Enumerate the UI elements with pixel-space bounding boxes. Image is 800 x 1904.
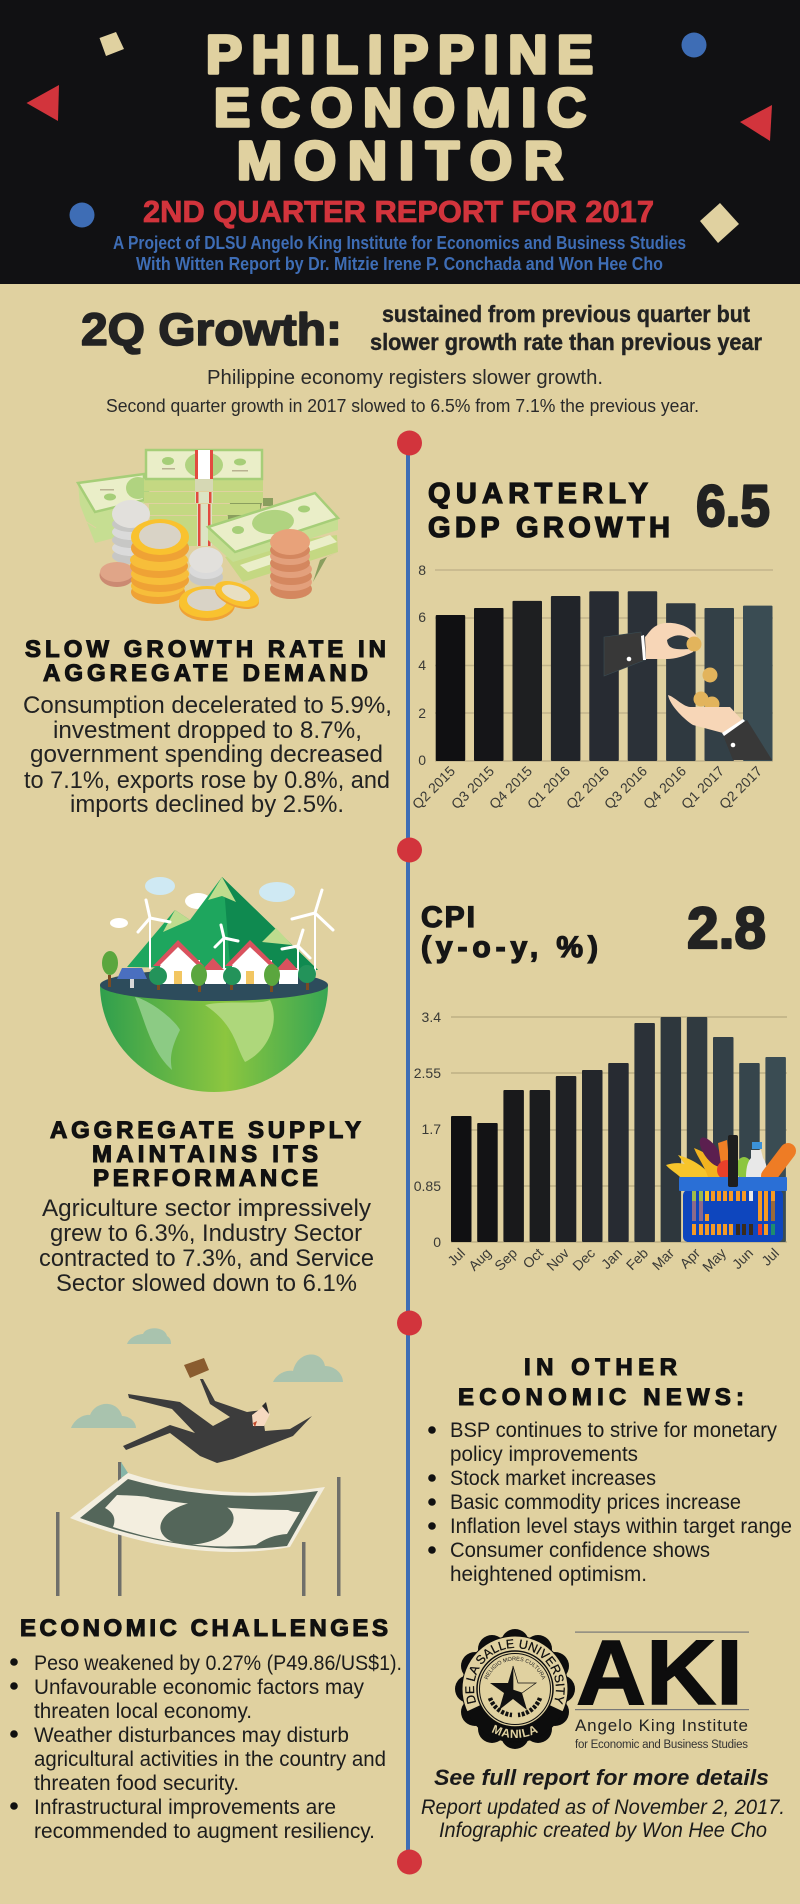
value 6.5: 6.5 (696, 474, 770, 539)
bar chart: CPI: Mar (649, 1245, 677, 1273)
body text: Consumption decelerated to 5.9%, (23, 692, 392, 719)
body text: Agriculture sector impressively (42, 1195, 371, 1222)
icon: money pile (78, 450, 338, 621)
timeline (397, 430, 422, 1874)
banknote net (70, 1473, 325, 1552)
bullet list: BSP continues to strive for monetary (450, 1418, 777, 1442)
bar chart: CPI: Jun (729, 1245, 756, 1272)
logo: Angelo King Institute: for Economic and Business Studies (575, 1739, 748, 1751)
bar chart: GDP: Q2 2015 (409, 763, 458, 812)
panel: aggregate demand text (23, 636, 392, 818)
bar chart: GDP: 2 (418, 705, 426, 721)
bar chart: GDP: 0 (418, 752, 426, 768)
bullet list: policy improvements (450, 1442, 638, 1466)
body text: investment dropped to 8.7%, (53, 717, 362, 744)
bar chart: GDP: 6 (418, 609, 426, 625)
bar chart: CPI: Dec (569, 1245, 598, 1274)
heading: GDP GROWTH (428, 512, 670, 544)
heading (458, 1354, 744, 1411)
heading: IN OTHER (524, 1354, 677, 1381)
bar chart: CPI: Feb (623, 1245, 651, 1273)
silver coin stack middle (189, 547, 223, 586)
subheading: slower growth rate than previous year (370, 329, 762, 355)
title: PHILIPPINE (206, 25, 593, 85)
heading: ECONOMIC NEWS: (458, 1384, 744, 1411)
heading: slow growth rate: SLOW GROWTH RATE IN (25, 636, 386, 663)
project credits: With Witten Report by Dr. Mitzie Irene P. Conchada and Won Hee Cho (136, 254, 663, 274)
copper coin (100, 563, 134, 587)
bar chart: CPI (414, 1009, 787, 1275)
body text: government spending decreased (30, 741, 383, 768)
project credits: A Project of DLSU Angelo King Institute for Economics and Business Studies (113, 233, 686, 253)
logo: De La Salle University seal: RELIGIO MORES CULTURA (484, 1656, 546, 1680)
subheading: sustained from previous quarter but (382, 301, 750, 327)
icon: green earth with village (100, 877, 333, 1092)
bullet list: Infrastructural improvements are (34, 1795, 336, 1819)
bar chart: CPI: Jan (598, 1245, 625, 1272)
icon: hands and coins (604, 623, 772, 760)
panel: CPI (414, 896, 788, 1275)
bullet list: threaten food security. (34, 1771, 239, 1795)
heading (428, 478, 670, 544)
bar chart: GDP: 4 (418, 657, 426, 673)
bullet list: Stock market increases (450, 1466, 656, 1490)
heading: QUARTERLY (428, 478, 648, 510)
heading: CPI (421, 901, 475, 934)
footer notes (421, 1765, 785, 1842)
paper band (195, 450, 213, 479)
bar chart: CPI: Sep (491, 1245, 520, 1274)
bar chart: GDP: Q2 2017 (716, 763, 765, 812)
icon: red triangle left (26, 85, 59, 121)
bullet list: agricultural activities in the country and (34, 1747, 386, 1771)
body text: contracted to 7.3%, and Service (39, 1245, 374, 1272)
intro text (106, 366, 699, 416)
bar chart: CPI: 0.85 (414, 1178, 441, 1194)
bar chart: GDP: Q2 2016 (563, 763, 612, 812)
bar chart: GDP: Q4 2016 (640, 763, 689, 812)
body text: to 7.1%, exports rose by 0.8%, and (24, 767, 390, 794)
footer notes: Report updated as of November 2, 2017. (421, 1796, 785, 1819)
trees (102, 951, 316, 992)
bullet list: threaten local economy. (34, 1699, 252, 1723)
bar chart: GDP: 8 (418, 562, 426, 578)
bullet list (10, 1651, 402, 1843)
heading: (y-o-y, %) (421, 931, 598, 964)
intro text: Philippine economy registers slower growth. (207, 366, 603, 389)
bar chart: CPI: Apr (676, 1245, 703, 1272)
hemisphere globe (100, 985, 328, 1092)
body text: imports declined by 2.5%. (70, 791, 344, 818)
body text (39, 1195, 374, 1297)
bullet list (428, 1418, 792, 1586)
heading: slow growth rate (25, 636, 386, 687)
heading: aggregate supply (50, 1117, 361, 1192)
bullet list: recommended to augment resiliency. (34, 1819, 375, 1843)
icon: blue circle left (70, 202, 94, 228)
intro text: Second quarter growth in 2017 slowed to 6.5% from 7.1% the previous year. (106, 396, 699, 416)
bar chart: GDP (409, 562, 773, 812)
heading: slow growth rate: AGGREGATE DEMAND (43, 660, 368, 687)
footer notes: See full report for more details (434, 1765, 769, 1790)
logo: De La Salle University seal (455, 1629, 575, 1749)
gold coins front (179, 589, 235, 621)
clouds (71, 1328, 343, 1428)
bar chart: CPI: Jul (444, 1245, 468, 1269)
project credits (113, 233, 686, 274)
shadow (263, 498, 273, 506)
right bills (313, 552, 338, 582)
bar chart: CPI: Nov (543, 1245, 572, 1274)
subtitle: quarter report: 2ND QUARTER REPORT FOR 2017 (143, 194, 654, 229)
briefcase (184, 1358, 209, 1378)
panel: economic challenges (10, 1615, 402, 1843)
body text: grew to 6.3%, Industry Sector (50, 1220, 362, 1247)
header band (0, 0, 800, 284)
panel: other economic news (428, 1354, 792, 1586)
bullet list: Unfavourable economic factors may (34, 1675, 364, 1699)
title: ECONOMIC (214, 78, 586, 138)
houses (153, 940, 298, 984)
heading: ECONOMIC CHALLENGES (20, 1615, 388, 1642)
bar chart: GDP: Q4 2015 (486, 763, 535, 812)
bar chart: CPI: Oct (519, 1245, 546, 1272)
icon: red triangle right (740, 105, 772, 141)
bar chart: GDP: Q1 2017 (678, 763, 727, 812)
net posts (56, 1462, 340, 1596)
title: MONITOR (237, 131, 563, 191)
mountains (127, 877, 318, 970)
bullet list: heightened optimism. (450, 1562, 647, 1586)
icon: cream diamond top left (100, 32, 124, 56)
copper coin stack (270, 529, 312, 599)
title (206, 25, 593, 191)
footer notes: Infographic created by Won Hee Cho (439, 1819, 767, 1842)
bar chart: GDP: Q1 2016 (524, 763, 573, 812)
panel: quarterly GDP growth (409, 474, 773, 812)
bar chart: CPI: May (699, 1245, 729, 1275)
heading: 2Q Growth: 2Q Growth: (81, 304, 342, 355)
bar chart: GDP: Q3 2016 (601, 763, 650, 812)
bar chart: CPI: 0 (433, 1234, 441, 1250)
bar chart: CPI: 1.7 (422, 1121, 441, 1137)
bar chart: CPI: 2.55 (414, 1065, 441, 1081)
bar chart: CPI: Aug (465, 1245, 494, 1274)
center bill stack (144, 479, 263, 491)
bullet list: Peso weakened by 0.27% (P49.86/US$1). (34, 1651, 402, 1675)
logo: De La Salle University seal: MANILA (492, 1724, 538, 1738)
solar panel (117, 968, 147, 979)
icon: grocery basket (666, 1134, 788, 1242)
bullet list: Weather disturbances may disturb (34, 1723, 349, 1747)
icon: blue circle top right (682, 32, 706, 58)
intro block (81, 301, 762, 416)
wind turbines (138, 890, 333, 975)
panel: aggregate supply text (39, 1117, 374, 1297)
heading: aggregate supply: AGGREGATE SUPPLY (50, 1117, 361, 1144)
logo: Angelo King Institute: Angelo King Institute (575, 1716, 748, 1735)
businessman (123, 1379, 312, 1463)
icon: businessman falling on money net (56, 1328, 343, 1596)
bar chart: CPI: 3.4 (422, 1009, 441, 1025)
bar chart: GDP: Q3 2015 (448, 763, 497, 812)
logo: De La Salle University seal: DE LA SALLE UNIVERSITY (465, 1639, 565, 1705)
bullet list: Basic commodity prices increase (450, 1490, 741, 1514)
clouds (110, 877, 295, 928)
gold coin stack (130, 519, 189, 604)
heading (421, 901, 598, 964)
body text: Sector slowed down to 6.1% (56, 1270, 357, 1297)
silver coin stack left (112, 500, 150, 564)
heading: aggregate supply: MAINTAINS ITS (92, 1141, 318, 1168)
subheading (370, 301, 762, 355)
left bills (78, 483, 144, 543)
bar chart: CPI: Jul (758, 1245, 782, 1269)
bullet list: Consumer confidence shows (450, 1538, 710, 1562)
value 2.8: 2.8 (687, 896, 766, 961)
heading: aggregate supply: PERFORMANCE (93, 1165, 318, 1192)
icon: cream diamond right (700, 203, 739, 243)
body text (23, 692, 392, 818)
logo: Angelo King Institute: AKI (576, 1622, 743, 1724)
